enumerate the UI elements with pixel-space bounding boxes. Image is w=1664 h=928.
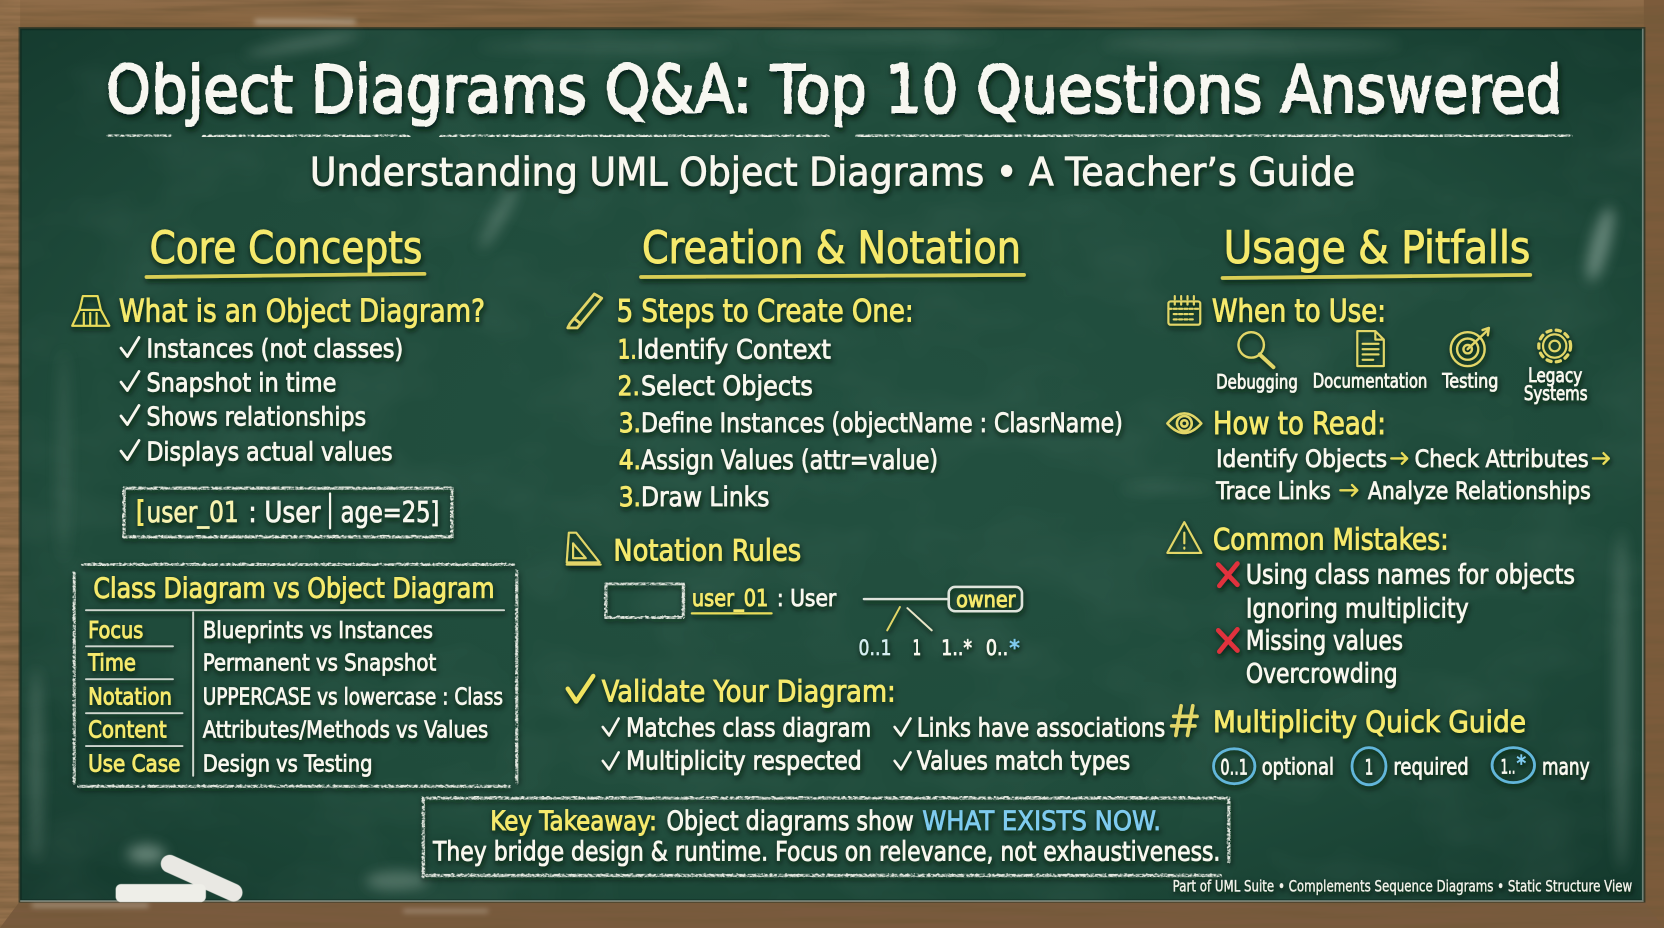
row: time [87,649,436,677]
callout: key takeaway [423,798,1229,877]
object name: user_01 [692,584,768,612]
mistakes list [1246,560,1575,689]
multiplicity: optional [1214,749,1334,784]
heading: when to use: When to Use: [1212,294,1386,330]
heading: what is an object diagram: What is an Object Diagram? [119,294,485,330]
use: testing: Testing [1441,369,1498,392]
step 3: Define Instances (objectName : ClasrName) [641,408,1123,439]
takeaway line 1: WHAT EXISTS NOW. [922,806,1161,837]
column heading: Core Concepts: Core Concepts [150,222,422,274]
icon: blueprint building [72,296,109,326]
reading sequence line 1: Identify Objects [1216,444,1387,473]
row: use case [88,750,372,778]
red crosses [1218,564,1237,652]
heading: five steps: 5 Steps to Create One: [617,294,914,330]
table heading: Class Diagram vs Object Diagram [93,571,495,604]
use: legacy systems: Legacy [1528,364,1582,387]
step 4: 4. [619,445,641,476]
multiplicity labels: 1..* [941,636,972,661]
use: documentation [1313,331,1427,392]
object example box: [ [136,495,145,530]
panel: common mistakes [1167,522,1575,689]
icon: set square [567,533,601,565]
step 5: Draw Links [641,482,769,513]
icon: pencil [568,294,602,328]
icon: warning triangle [1167,522,1201,553]
multiplicity labels: 0..1 [859,636,891,661]
multiplicity labels: * [1009,636,1020,661]
mistakes list: Overcrowding [1246,658,1398,689]
checklist: Shows relationships [146,403,366,433]
panel: how to read [1167,406,1609,505]
row: notation: UPPERCASE vs lowercase : Class [203,683,503,711]
multiplicity labels: 0.. [986,636,1008,661]
row: time: Time [87,649,136,677]
reading sequence line 2: Trace Links [1215,476,1331,505]
heading: how to read: How to Read: [1213,406,1386,442]
multiplicity: optional: 0..1 [1220,756,1248,781]
checklist: Displays actual values [146,438,393,468]
use: legacy systems: Systems [1524,382,1588,405]
checklist: Snapshot in time [146,369,336,399]
multiplicity labels [859,636,1020,661]
step 2: Select Objects [641,371,813,402]
object name: : User [777,584,837,612]
panel: validate your diagram [568,674,1165,776]
use: testing [1441,328,1498,392]
title underline [108,135,1571,137]
takeaway line 2: They bridge design & runtime. Focus on relevance, not exhaustiveness. [432,837,1220,868]
takeaway line 1: Key Takeaway: [490,806,657,837]
row: use case: Design vs Testing [203,750,372,778]
icon: calendar [1168,296,1200,325]
icon: hash [1172,706,1197,735]
row: focus [88,616,433,644]
checklist: Instances (not classes) [146,335,403,365]
column heading: Usage & Pitfalls: Usage & Pitfalls [1224,222,1530,274]
object example box: age=25] [341,495,439,529]
reading sequence line 2: Analyze Relationships [1368,476,1591,505]
validation checklist: Links have associations [917,713,1165,743]
object example box: : User [248,495,321,529]
object rectangle [606,584,683,618]
panel: multiplicity quick guide [1172,705,1590,785]
row: notation: Notation [88,683,172,711]
step 5: 3. [619,482,641,513]
mistakes list: Ignoring multiplicity [1246,594,1469,625]
step 2: 2. [618,371,640,402]
step 1: 1. [618,335,637,366]
multiplicity: many: * [1516,751,1526,776]
use: documentation: Documentation [1313,369,1427,392]
multiplicity: many: 1.. [1501,756,1515,779]
mistakes list: Using class names for objects [1246,560,1575,591]
heading: notation rules: Notation Rules [613,533,801,568]
object name [692,584,837,613]
validation checklist: Multiplicity respected [626,746,862,776]
use: debugging: Debugging [1216,370,1298,393]
row: use case: Use Case [88,750,180,778]
takeaway line 1: Object diagrams show [666,806,914,837]
column heading: Creation & Notation: Creation & Notation [642,222,1021,274]
multiplicity: required: 1 [1365,756,1373,781]
association line with owner role: owner [956,587,1016,613]
multiplicity: required: required [1393,753,1469,781]
step 4: Assign Values (attr=value) [641,445,938,476]
row: focus: Focus [88,616,143,644]
step 3: 3. [619,408,641,439]
row: time: Permanent vs Snapshot [203,649,436,677]
association line with owner role [864,587,1022,630]
panel: what is an object diagram [72,294,485,537]
panel: notation rules [567,533,1022,661]
reading sequence line 1 [1216,444,1609,473]
multiplicity: required [1352,748,1469,785]
validation checklist [603,713,1165,776]
row: content: Content [88,716,167,744]
heading: validate: Validate Your Diagram: [602,674,896,709]
use: debugging [1216,332,1298,393]
object example box [124,488,452,537]
validation checklist: Matches class diagram [626,713,871,743]
heading: multiplicity quick guide: Multiplicity Quick Guide [1213,705,1526,740]
multiplicity: many: many [1542,753,1590,781]
step 1: Identify Context [637,335,831,366]
use: legacy systems [1524,330,1588,405]
icon: large check [568,676,593,701]
validation checklist: Values match types [917,746,1130,776]
panel: five steps [568,294,1123,513]
mistakes list: Missing values [1246,625,1403,656]
reading sequence line 1: Check Attributes [1415,444,1589,473]
takeaway line 1 [490,806,1161,837]
chalk sticks [116,864,233,902]
panel: when to use [1168,294,1588,405]
subtitle: Understanding UML Object Diagrams • A Teacher’s Guide [310,151,1355,196]
row: focus: Blueprints vs Instances [203,616,433,644]
multiplicity labels: 1 [913,636,921,661]
multiplicity: optional: optional [1262,753,1334,781]
checklist [121,335,403,468]
multiplicity: many [1492,748,1590,783]
icon: eye [1167,413,1201,433]
heading: common mistakes: Common Mistakes: [1213,523,1449,558]
row: notation [88,683,503,711]
object example box: user_01 [146,495,239,529]
panel: class diagram vs object diagram table [74,565,517,786]
row: content [88,716,488,744]
reading sequence line 2 [1215,476,1591,505]
row: content: Attributes/Methods vs Values [203,716,488,744]
